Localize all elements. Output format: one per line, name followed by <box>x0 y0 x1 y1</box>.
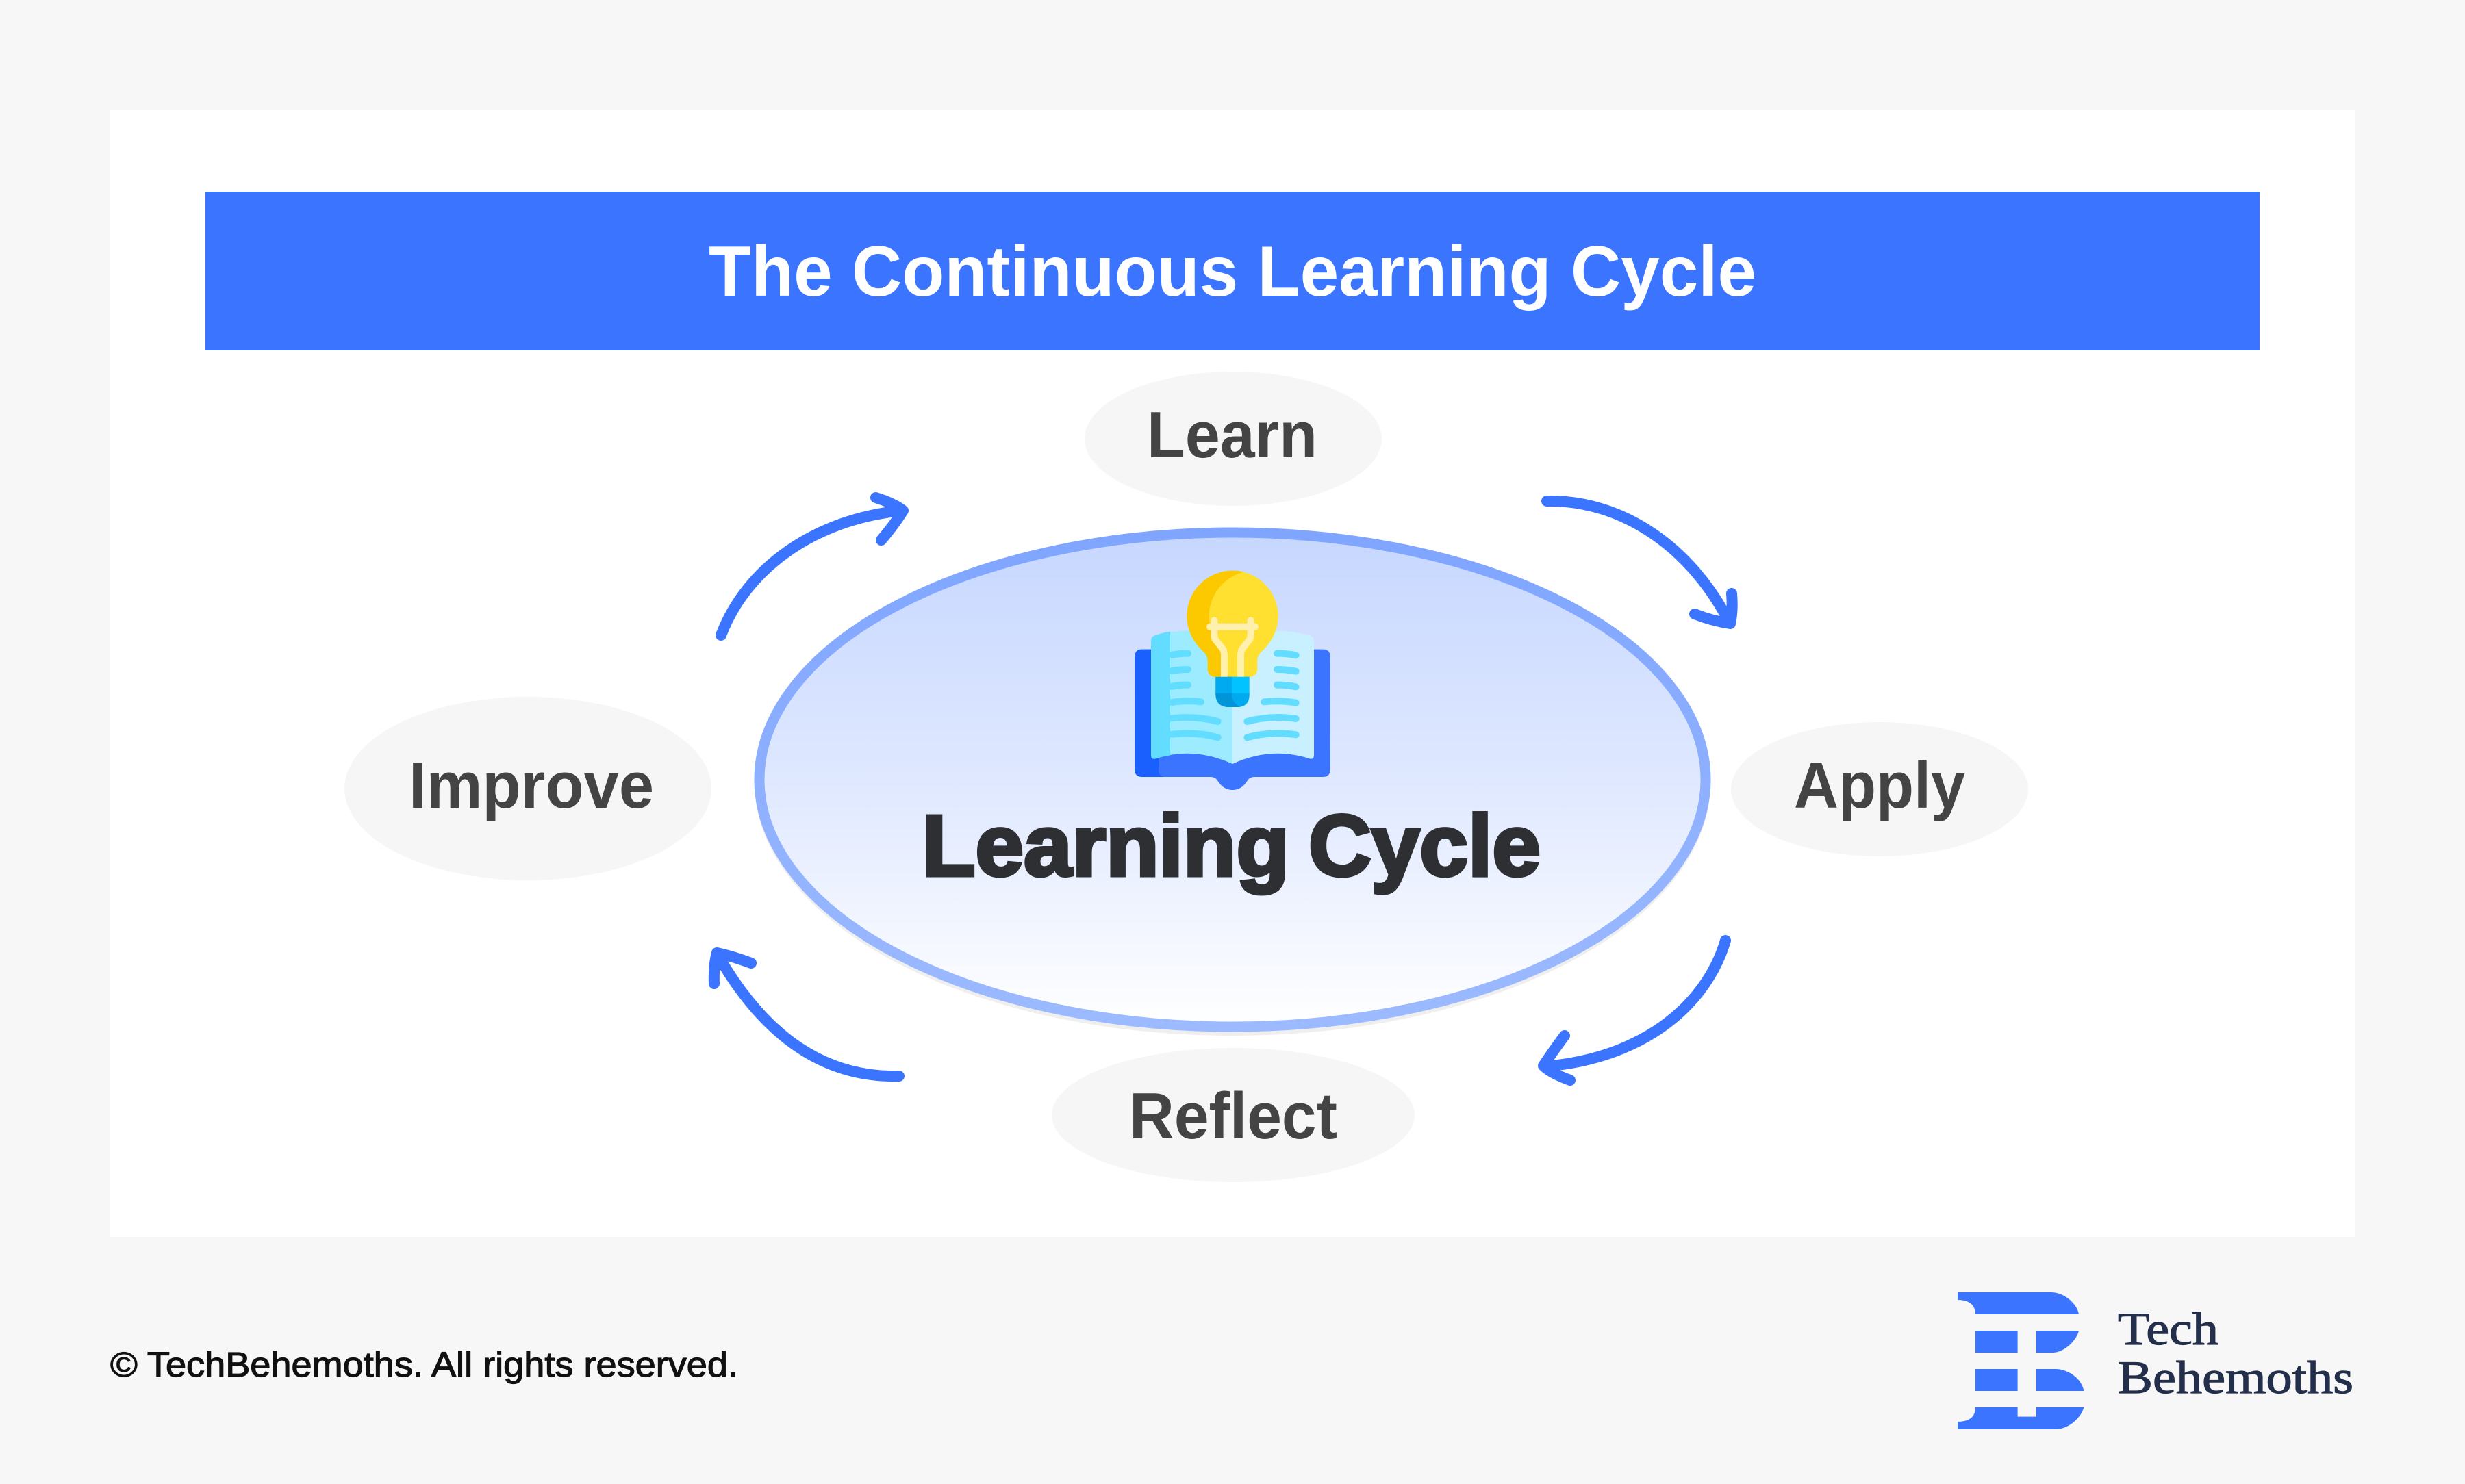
label: Apply <box>1731 722 2028 856</box>
label: Improve: Improve <box>409 749 654 822</box>
central label <box>922 797 1541 894</box>
left page <box>1151 630 1232 764</box>
icon: book and light bulb <box>1135 571 1330 790</box>
logo wordmark <box>2118 1303 2353 1403</box>
label: Learn <box>1085 372 1382 506</box>
arrow: Apply to Reflect <box>1543 941 1726 1080</box>
arrow: Learn to Apply <box>1547 501 1732 624</box>
label: Improve <box>344 697 711 880</box>
logo: TechBehemoths <box>1958 1292 2353 1429</box>
logo wordmark: Tech <box>2118 1303 2218 1355</box>
logo wordmark: Behemoths <box>2118 1351 2353 1403</box>
label: Learn: Learn <box>1147 398 1317 472</box>
book cover <box>1135 650 1330 790</box>
bulb shade <box>1187 571 1243 677</box>
right page <box>1232 630 1314 764</box>
bulb glass <box>1187 571 1278 677</box>
arrow: Improve to Learn <box>721 498 903 635</box>
central ellipse <box>755 530 1710 1036</box>
label: Reflect: Reflect <box>1129 1079 1337 1153</box>
text lines <box>1172 654 1296 737</box>
logo mark <box>1958 1292 2084 1429</box>
label: Reflect <box>1052 1048 1415 1182</box>
label: Apply: Apply <box>1794 749 1965 822</box>
bulb filament <box>1210 620 1255 677</box>
central label: Cycle <box>1309 797 1541 894</box>
arrow: Reflect to Improve <box>714 953 899 1076</box>
book cover shade <box>1135 650 1164 777</box>
white card <box>110 110 2355 1237</box>
central label: Learning <box>922 797 1289 894</box>
title banner <box>205 192 2260 350</box>
bulb base <box>1215 676 1250 707</box>
left page shade <box>1151 632 1170 759</box>
copyright: © TechBehemoths. All rights reserved. <box>110 1345 738 1384</box>
title: The Continuous Learning Cycle <box>709 232 1756 311</box>
